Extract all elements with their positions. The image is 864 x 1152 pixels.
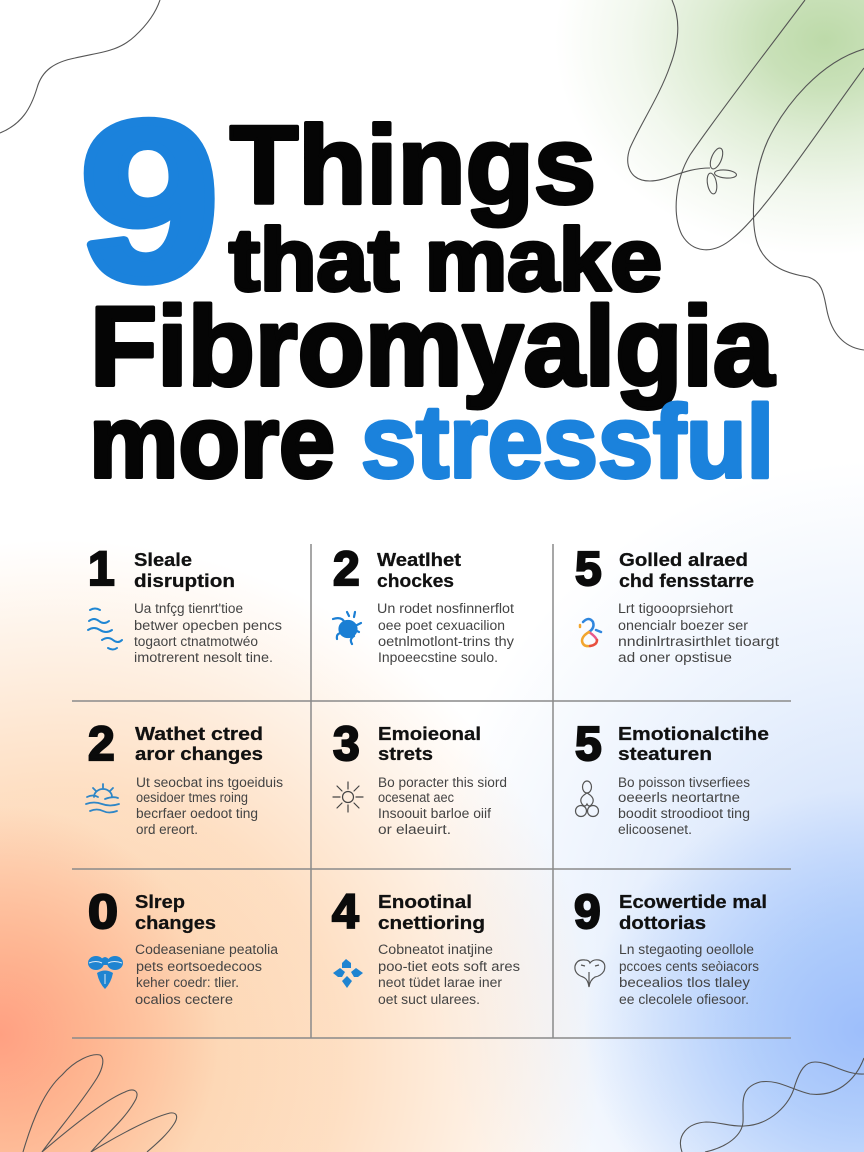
body text: Codeaseniane peatolia <box>135 942 278 957</box>
title line: that make: that make <box>229 210 662 309</box>
title line: Fibromyalgia: Fibromyalgia <box>90 284 775 409</box>
panel: item 4 <box>86 718 283 837</box>
heading <box>134 549 235 591</box>
icon: four diamonds <box>333 959 363 988</box>
heading: steaturen <box>618 743 712 764</box>
icon: bug <box>333 612 361 644</box>
body text: oeeerls neortartne <box>618 790 740 805</box>
icon: waves <box>88 608 122 650</box>
body text: imotrerent nesolt tine. <box>134 650 273 665</box>
body text: ocesenat aec <box>378 790 454 805</box>
heading: Enootinal <box>378 891 472 912</box>
heading <box>377 549 461 591</box>
body text: Ua tnfçg tienrt'tioe <box>134 601 243 616</box>
heading: Emoieonal <box>378 723 481 744</box>
heading: Ecowertide mal <box>619 891 767 912</box>
body text: ocalios cectere <box>135 992 233 1007</box>
heading <box>378 891 485 933</box>
body text <box>135 942 278 1007</box>
body text: oee poet cexuacilion <box>378 618 505 633</box>
big blue numeral 9: 9 <box>80 74 219 327</box>
body text: Cobneatot inatjine <box>378 942 493 957</box>
body text: Inpoeecstine soulo. <box>378 650 498 665</box>
body text: elicoosenet. <box>618 822 692 837</box>
heading: cnettioring <box>378 912 485 933</box>
number: 3 <box>333 718 360 771</box>
body text <box>377 601 514 665</box>
panel: item 3 <box>575 543 779 665</box>
body text: ad oner opstisue <box>618 650 732 665</box>
title <box>80 74 775 499</box>
number: 5 <box>575 718 602 771</box>
heading: Slrep <box>135 891 185 912</box>
body text: or elaeuirt. <box>378 822 451 837</box>
heading: chd fensstarre <box>619 570 754 591</box>
body text: Bo poracter this siord <box>378 775 507 790</box>
body text <box>136 775 283 837</box>
grid lines <box>72 544 791 1038</box>
heading: Sleale <box>134 549 192 570</box>
body text: Lrt tigoooprsiehort <box>618 601 733 616</box>
heading <box>378 723 481 764</box>
icon: heart outline <box>575 960 605 987</box>
number: 0 <box>88 886 118 939</box>
heading: Weatlhet <box>377 549 461 570</box>
body text: Ut seocbat ins tgoeiduis <box>136 775 283 790</box>
number: 1 <box>88 543 115 596</box>
body text: pets eortsoedecoos <box>136 959 262 974</box>
number: 2 <box>88 718 115 771</box>
icon: blue butterfly <box>88 956 123 989</box>
heading: changes <box>135 912 216 933</box>
decorative line art: top right <box>628 0 864 350</box>
body text <box>134 601 282 665</box>
icon: small flower <box>706 146 737 195</box>
heading: Emotionalctihe <box>618 723 769 744</box>
heading: Golled alraed <box>619 549 748 570</box>
decorative curve: top left <box>0 0 160 133</box>
number: 2 <box>333 543 360 596</box>
title line: Things: Things <box>230 104 596 227</box>
decorative curves: bottom right <box>680 1058 864 1152</box>
body text: onencialr boezer ser <box>618 618 749 633</box>
icon: sun over waves <box>86 784 119 812</box>
icon: leaf and circles <box>576 781 598 816</box>
body text <box>619 942 759 1007</box>
body text: oesidoer tmes roing <box>136 790 248 805</box>
number: 9 <box>574 886 601 939</box>
number: 5 <box>575 543 602 596</box>
panel: item 1 <box>88 543 282 665</box>
heading: disruption <box>134 570 235 591</box>
heading <box>619 549 754 591</box>
body text: Un rodet nosfinnerflot <box>377 601 514 616</box>
body text: oet suct ularees. <box>378 992 480 1007</box>
body text: Bo poisson tivserfiees <box>618 775 750 790</box>
panel: item 7 <box>88 886 278 1007</box>
body text <box>378 942 520 1007</box>
panel: item 2 <box>333 543 514 665</box>
panel: item 8 <box>332 886 520 1007</box>
body text: ord ereort. <box>136 822 198 837</box>
panel: item 6 <box>575 718 769 837</box>
body text: keher coedr: tlier. <box>136 975 239 990</box>
body text: becealios tlos tlaley <box>619 975 750 990</box>
heading: strets <box>378 743 433 764</box>
body text: becrfaer oedoot ting <box>136 806 258 821</box>
icon: colourful knot <box>580 619 601 646</box>
body text: pccoes cents seòiacors <box>619 959 759 974</box>
number: 4 <box>332 886 359 939</box>
heading: dottorias <box>619 912 706 933</box>
body text: nndinlrtrasirthlet tioargt <box>618 634 779 649</box>
heading: chockes <box>377 570 454 591</box>
title: stressful <box>361 384 774 499</box>
panel: item 5 <box>333 718 507 837</box>
body text <box>618 775 750 837</box>
panel: item 9 <box>574 886 767 1007</box>
body text: Ln stegaoting oeollole <box>619 942 754 957</box>
icon: sun outline <box>333 782 363 812</box>
body text: ee clecolele ofiesoor. <box>619 992 749 1007</box>
body text: Insoouit barloe oiif <box>378 806 491 821</box>
heading: Wathet ctred <box>135 723 263 744</box>
body text <box>378 775 507 837</box>
body text: poo-tiet eots soft ares <box>378 959 520 974</box>
heading <box>619 891 767 933</box>
body text: oetnlmotlont-trins thy <box>378 634 514 649</box>
body text: neot tüdet larae iner <box>378 975 503 990</box>
title line: more stressful: more <box>89 384 335 499</box>
body text: boodit stroodioot ting <box>618 806 750 821</box>
heading <box>618 723 769 764</box>
heading: aror changes <box>135 743 263 764</box>
body text <box>618 601 779 665</box>
body text: betwer opecben pencs <box>134 618 282 633</box>
heading <box>135 723 263 764</box>
heading <box>135 891 216 933</box>
decorative leaves: bottom left <box>23 1055 177 1152</box>
body text: togaort ctnatmotwéo <box>134 634 258 649</box>
